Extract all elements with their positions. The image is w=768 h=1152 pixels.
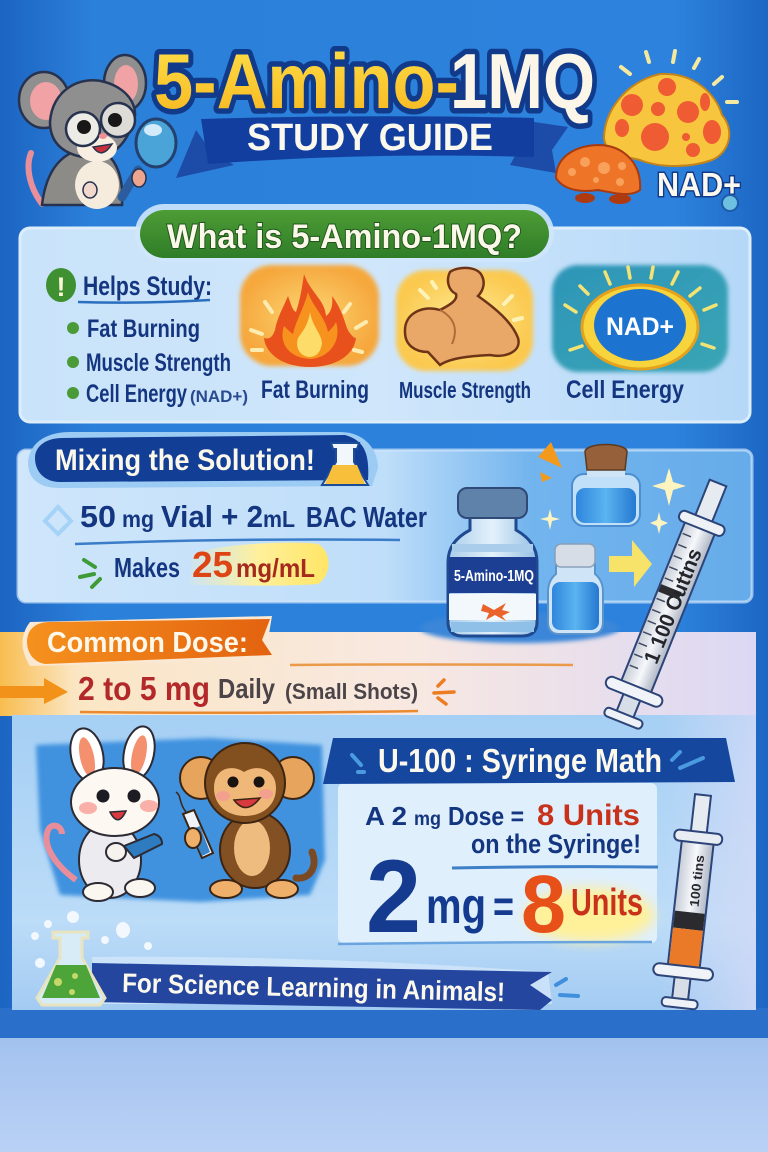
icon: yellow flask — [322, 443, 368, 485]
dose statement — [365, 799, 641, 859]
dose text: 2 to 5 mg — [78, 670, 210, 707]
large 5-Amino-1MQ vial — [448, 488, 537, 636]
dose statement: on the Syringe! — [471, 829, 641, 859]
dose text — [78, 670, 454, 707]
equation: 2 mg = 8 units: 8 — [521, 859, 566, 950]
illustration: large syringe — [594, 472, 746, 734]
vial recipe text: BAC Water — [306, 502, 427, 534]
illustration: monkey with vial — [176, 743, 314, 898]
mouse mascot with magnifying glass — [19, 55, 176, 209]
dose statement: 8 Units — [537, 799, 640, 832]
NAD+ label: NAD+ — [657, 166, 741, 203]
small molecule dot — [722, 195, 738, 211]
icon captions: Muscle Strength — [399, 377, 531, 403]
title: 5-Amino- — [154, 37, 459, 125]
small orange cell — [556, 145, 640, 204]
illustration: large syringe: 1 100 Cuttns — [640, 545, 707, 667]
illustration: fat cell and NAD+ — [556, 51, 741, 211]
highlight glow — [526, 888, 654, 942]
blue paint behind animals — [36, 738, 325, 902]
equation: 2 mg = 8 units: 2 — [366, 839, 421, 955]
heading pill: Mixing the Solution! — [55, 444, 315, 477]
orange accent marks — [538, 442, 562, 482]
title: 1MQ — [450, 37, 595, 125]
small water vial — [548, 544, 603, 634]
icon: NAD+ cell energy — [552, 265, 728, 372]
subtitle ribbon: study guide — [176, 116, 568, 178]
dose text: Daily — [218, 673, 275, 704]
blue paint shadow under vials — [420, 613, 620, 643]
helps study list: Muscle Strength — [86, 349, 231, 377]
icon captions: Fat Burning — [261, 376, 369, 404]
icon: flexed arm — [396, 268, 533, 371]
panel: what is 5-Amino-1MQ — [20, 204, 750, 422]
green heading pill — [135, 204, 554, 262]
heading pill — [28, 432, 378, 488]
orange ribbon heading — [22, 616, 276, 666]
dose statement: Dose = — [448, 801, 524, 831]
icon captions: Cell Energy — [566, 376, 684, 404]
dark ribbon heading — [323, 738, 735, 784]
panel: lower section — [12, 715, 756, 1010]
helps study list: Helps Study: — [83, 271, 212, 301]
icon captions — [261, 376, 684, 404]
footer ribbon — [92, 957, 578, 1010]
large 5-Amino-1MQ vial: 5-Amino-1MQ — [454, 568, 534, 585]
vial recipe text: 50 — [80, 499, 116, 534]
icon: NAD+ cell energy: NAD+ — [606, 313, 674, 341]
equation: 2 mg = 8 units: mg — [426, 878, 486, 934]
helps study list — [46, 268, 248, 408]
makes 25 mg/mL: 25 — [192, 544, 233, 585]
illustration: rabbit with syringe — [47, 723, 162, 901]
icon: flame — [240, 265, 379, 367]
sparkles — [540, 468, 686, 534]
helps study list: ! — [56, 272, 66, 302]
dark ribbon heading: U-100 : Syringe Math — [378, 742, 662, 779]
makes 25 mg/mL — [80, 543, 328, 587]
vial recipe text: mg — [122, 506, 154, 532]
dose statement: mg — [414, 809, 441, 830]
orange ribbon heading: Common Dose: — [47, 627, 248, 659]
subtitle ribbon: study guide: STUDY GUIDE — [247, 117, 493, 159]
arrow: orange — [0, 678, 68, 704]
U-100 syringe math panel — [323, 738, 735, 955]
dose statement: A 2 — [365, 801, 407, 831]
vial recipe text: Vial + 2 — [161, 499, 263, 534]
icon: green flask with bubbles — [31, 911, 152, 1005]
arrow: yellow — [609, 540, 652, 587]
large yellow fat cell — [604, 74, 729, 166]
dose text: (Small Shots) — [285, 679, 418, 704]
makes 25 mg/mL: mg/mL — [236, 553, 315, 583]
panel: mixing the solution — [18, 432, 752, 602]
equation: 2 mg = 8 units: = — [493, 882, 514, 931]
equation: 2 mg = 8 units — [366, 839, 643, 955]
green heading pill: What is 5-Amino-1MQ? — [167, 218, 522, 256]
panel: common dose — [0, 616, 756, 716]
helps study list: (NAD+) — [190, 387, 248, 406]
equation: 2 mg = 8 units: Units — [571, 882, 643, 924]
helps study list: Cell Energy — [86, 380, 187, 408]
icon: diamond — [45, 507, 71, 534]
illustration: corked bottle — [572, 444, 640, 526]
vial recipe text — [80, 499, 427, 534]
vial recipe text: mL — [263, 506, 295, 532]
illustration: small syringe — [649, 792, 733, 1011]
footer ribbon: For Science Learning in Animals! — [122, 968, 505, 1007]
rays — [621, 51, 737, 102]
helps study list: Fat Burning — [87, 315, 200, 343]
illustration: small syringe: 100 tins — [687, 854, 707, 908]
makes 25 mg/mL: Makes — [114, 552, 180, 583]
white math card — [338, 783, 657, 943]
